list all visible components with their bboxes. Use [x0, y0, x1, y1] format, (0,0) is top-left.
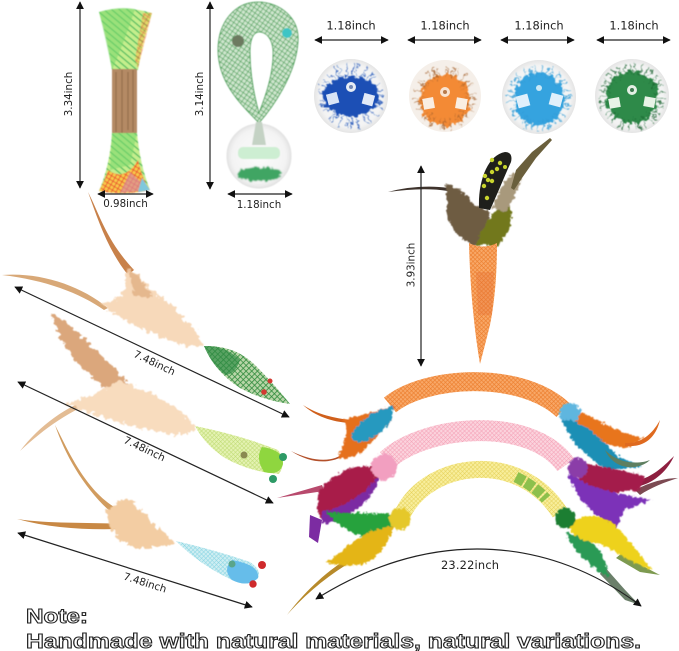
dimension: mouse 3 length 7.48inch: 7.48inch: [122, 571, 168, 596]
toy: mouse 3 with blue mesh: [17, 425, 266, 588]
toy: mouse 2 with lime mesh: [20, 314, 287, 483]
dimension: wand arc length 23.22inch: 23.22inch: [441, 558, 499, 572]
note text: Note:: [26, 606, 88, 628]
ball: green: [595, 59, 669, 133]
dimension: light blue ball 1.18inch: [501, 18, 574, 40]
wand: yellow mesh tube with feathers: [287, 469, 660, 615]
dimension: wand arc length 23.22inch: [316, 549, 641, 606]
toy: mouse 1 with green mesh: [2, 192, 290, 404]
dimension: toy 2 width 1.18inch: 1.18inch: [237, 199, 281, 211]
note text: [26, 606, 641, 651]
dimension: green ball 1.18inch: 1.18inch: [609, 18, 659, 32]
dimension: toy 1 height 3.34inch: 3.34inch: [63, 72, 75, 116]
toy: green mesh loop with ball: [218, 2, 298, 188]
dimension: orange ball 1.18inch: 1.18inch: [420, 18, 470, 32]
ball: blue: [314, 59, 388, 133]
dimension: toy 1 width 0.98inch: 0.98inch: [103, 198, 148, 210]
dimension: mouse 1 length 7.48inch: 7.48inch: [132, 348, 177, 378]
wand: pink mesh tube with feathers: [277, 431, 678, 543]
dimension: mouse 2 length 7.48inch: 7.48inch: [122, 434, 167, 464]
ball: orange: [409, 60, 481, 132]
dimension: carrot toy height 3.93inch: 3.93inch: [406, 243, 418, 287]
dimension: toy 1 width 0.98inch: [98, 194, 153, 210]
dimension: toy 2 width 1.18inch: [228, 194, 292, 211]
dimension: orange ball 1.18inch: [408, 18, 481, 40]
dimension: mouse 2 length 7.48inch: [18, 382, 273, 503]
dimension: mouse 1 length 7.48inch: [15, 287, 289, 417]
dimension: light blue ball 1.18inch: 1.18inch: [514, 18, 564, 32]
dimension: green ball 1.18inch: [597, 18, 670, 40]
dimension: mouse 3 length 7.48inch: [18, 533, 252, 607]
dimension: blue ball 1.18inch: [315, 18, 388, 40]
toy: orange carrot with dark feathers: [388, 138, 552, 364]
toy: catnip stick with rainbow mesh: [99, 8, 152, 193]
dimension: toy 2 height 3.14inch: 3.14inch: [194, 72, 206, 116]
row of four pom-pom balls: [314, 18, 670, 134]
ball: light blue: [502, 60, 576, 134]
wand: orange mesh tube with feathers: [291, 382, 660, 470]
dimension: blue ball 1.18inch: 1.18inch: [326, 18, 376, 32]
